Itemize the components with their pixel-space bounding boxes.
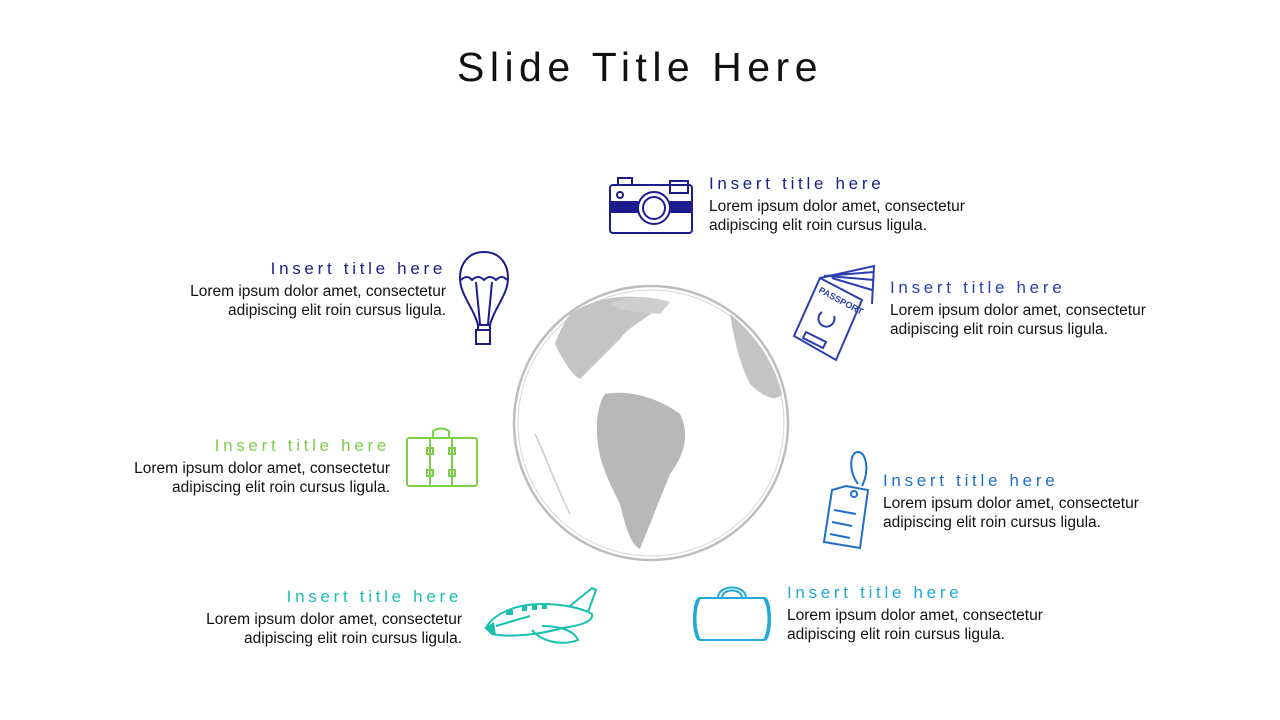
item: camera — [609, 174, 965, 234]
icon: plane — [484, 586, 598, 644]
icon: camera — [609, 177, 693, 234]
text: plane — [206, 587, 462, 647]
text: bag: adipiscing elit roin cursus ligula. — [787, 626, 1005, 643]
item: passport — [792, 264, 1146, 362]
icon: suitcase — [406, 428, 478, 487]
item: duffel bag — [693, 583, 1043, 643]
text: tag: Insert title here — [883, 471, 1058, 490]
text: camera — [709, 174, 965, 234]
text: tag: Lorem ipsum dolor amet, consectetur — [883, 495, 1139, 512]
icon: bag — [693, 586, 771, 641]
text: plane: Insert title here — [287, 587, 462, 606]
text: camera: adipiscing elit roin cursus ligula. — [709, 217, 927, 234]
icon: tag — [822, 451, 870, 550]
icon: passport: PASSPORT — [817, 285, 865, 317]
item: plane — [206, 586, 598, 647]
icon: passport — [792, 264, 876, 362]
item: suitcase — [134, 428, 478, 496]
text: suitcase: adipiscing elit roin cursus ligula. — [172, 479, 390, 496]
text: balloon: Insert title here — [271, 259, 446, 278]
text: passport: Insert title here — [890, 278, 1065, 297]
text: tag — [883, 471, 1139, 531]
text: balloon: Lorem ipsum dolor amet, consectetur — [190, 283, 446, 300]
text: suitcase — [134, 436, 390, 496]
text: suitcase: Insert title here — [215, 436, 390, 455]
text: passport: adipiscing elit roin cursus ligula. — [890, 321, 1108, 338]
item: luggage tag — [822, 451, 1139, 550]
text: passport — [890, 278, 1146, 338]
text: balloon: adipiscing elit roin cursus ligula. — [228, 302, 446, 319]
text: bag — [787, 583, 1043, 643]
text: bag: Insert title here — [787, 583, 962, 602]
text: tag: adipiscing elit roin cursus ligula. — [883, 514, 1101, 531]
text: suitcase: Lorem ipsum dolor amet, consectetur — [134, 460, 390, 477]
text: camera: Lorem ipsum dolor amet, consectetur — [709, 198, 965, 215]
item: balloon — [190, 251, 509, 345]
text: bag: Lorem ipsum dolor amet, consectetur — [787, 607, 1043, 624]
text: camera: Insert title here — [709, 174, 884, 193]
globe — [512, 284, 790, 562]
text: plane: Lorem ipsum dolor amet, consectetur — [206, 611, 462, 628]
icon: balloon — [459, 251, 509, 345]
title: Slide Title Here — [457, 44, 823, 90]
text: plane: adipiscing elit roin cursus ligula. — [244, 630, 462, 647]
text: passport: Lorem ipsum dolor amet, consectetur — [890, 302, 1146, 319]
text: balloon — [190, 259, 446, 319]
